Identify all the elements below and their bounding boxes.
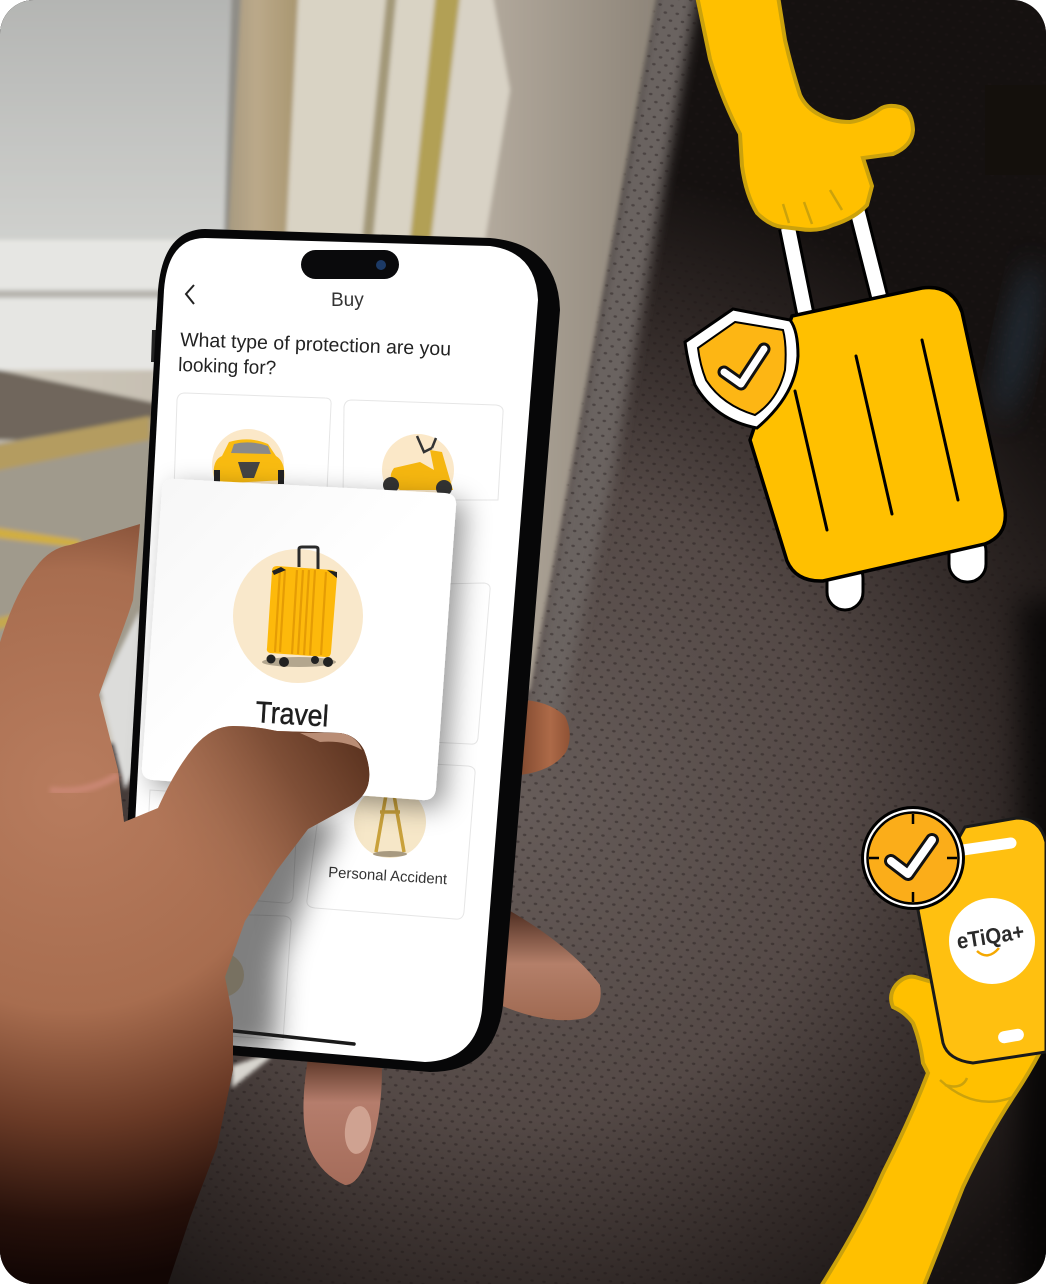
side buttons [151, 330, 156, 362]
dynamic island [301, 250, 399, 279]
finger three [303, 1058, 382, 1185]
header title: Buy [331, 290, 364, 311]
finger creases [783, 190, 842, 224]
fingernail [344, 1106, 372, 1154]
finger one [522, 700, 570, 775]
phone illustration with hand [820, 806, 1046, 1284]
clock badge [861, 806, 965, 910]
phone body [118, 229, 560, 1072]
finger two [500, 908, 601, 1020]
handle [788, 205, 879, 312]
option card: right middle [439, 582, 490, 744]
card label: Travel [255, 696, 329, 733]
shield [685, 309, 798, 428]
travel card content [233, 547, 363, 733]
home indicator [225, 1030, 354, 1044]
background: airplane window and wall [0, 0, 660, 760]
mini phone [918, 818, 1046, 1063]
logo badge [949, 898, 1035, 984]
phone pill top [963, 843, 1011, 850]
phone [118, 229, 560, 1072]
icon: shield check [724, 349, 764, 384]
thumb shading [162, 726, 370, 886]
phone pill bottom [997, 1028, 1025, 1044]
thumbnail [300, 733, 362, 750]
option card: car [174, 392, 332, 487]
hand behind phone: fingers [303, 700, 601, 1185]
back arrow [186, 285, 194, 304]
window strip below phone [232, 1052, 272, 1088]
palm, index finger and thumb silhouette [0, 524, 369, 1284]
suitcase body [750, 288, 1005, 581]
arm and fist [697, 0, 913, 230]
hand: front palm and thumb [0, 524, 369, 1284]
suitcase illustration with hand [685, 0, 1005, 610]
travel card [142, 479, 456, 800]
option card: personal accident [307, 758, 475, 919]
arm crease [940, 1078, 1013, 1102]
wheels [826, 545, 988, 612]
arm [820, 977, 1040, 1284]
phone screen [126, 238, 538, 1062]
option card: motorcycle [343, 400, 503, 506]
logo badge: eTiQa+ [955, 919, 1026, 954]
icon: suitcase in circle [233, 547, 363, 683]
option card: personal accident: Personal Accident [328, 864, 448, 888]
question heading: looking for? [178, 354, 277, 379]
suitcase lines [795, 340, 958, 530]
question heading [179, 332, 450, 377]
palm crease [50, 775, 118, 791]
option card: bottom middle left [145, 790, 298, 903]
window strip beside hand [100, 610, 140, 790]
option card: bottom left [225, 914, 292, 1040]
question heading: What type of protection are you [180, 329, 451, 360]
hand shadow on screen [225, 809, 352, 1050]
